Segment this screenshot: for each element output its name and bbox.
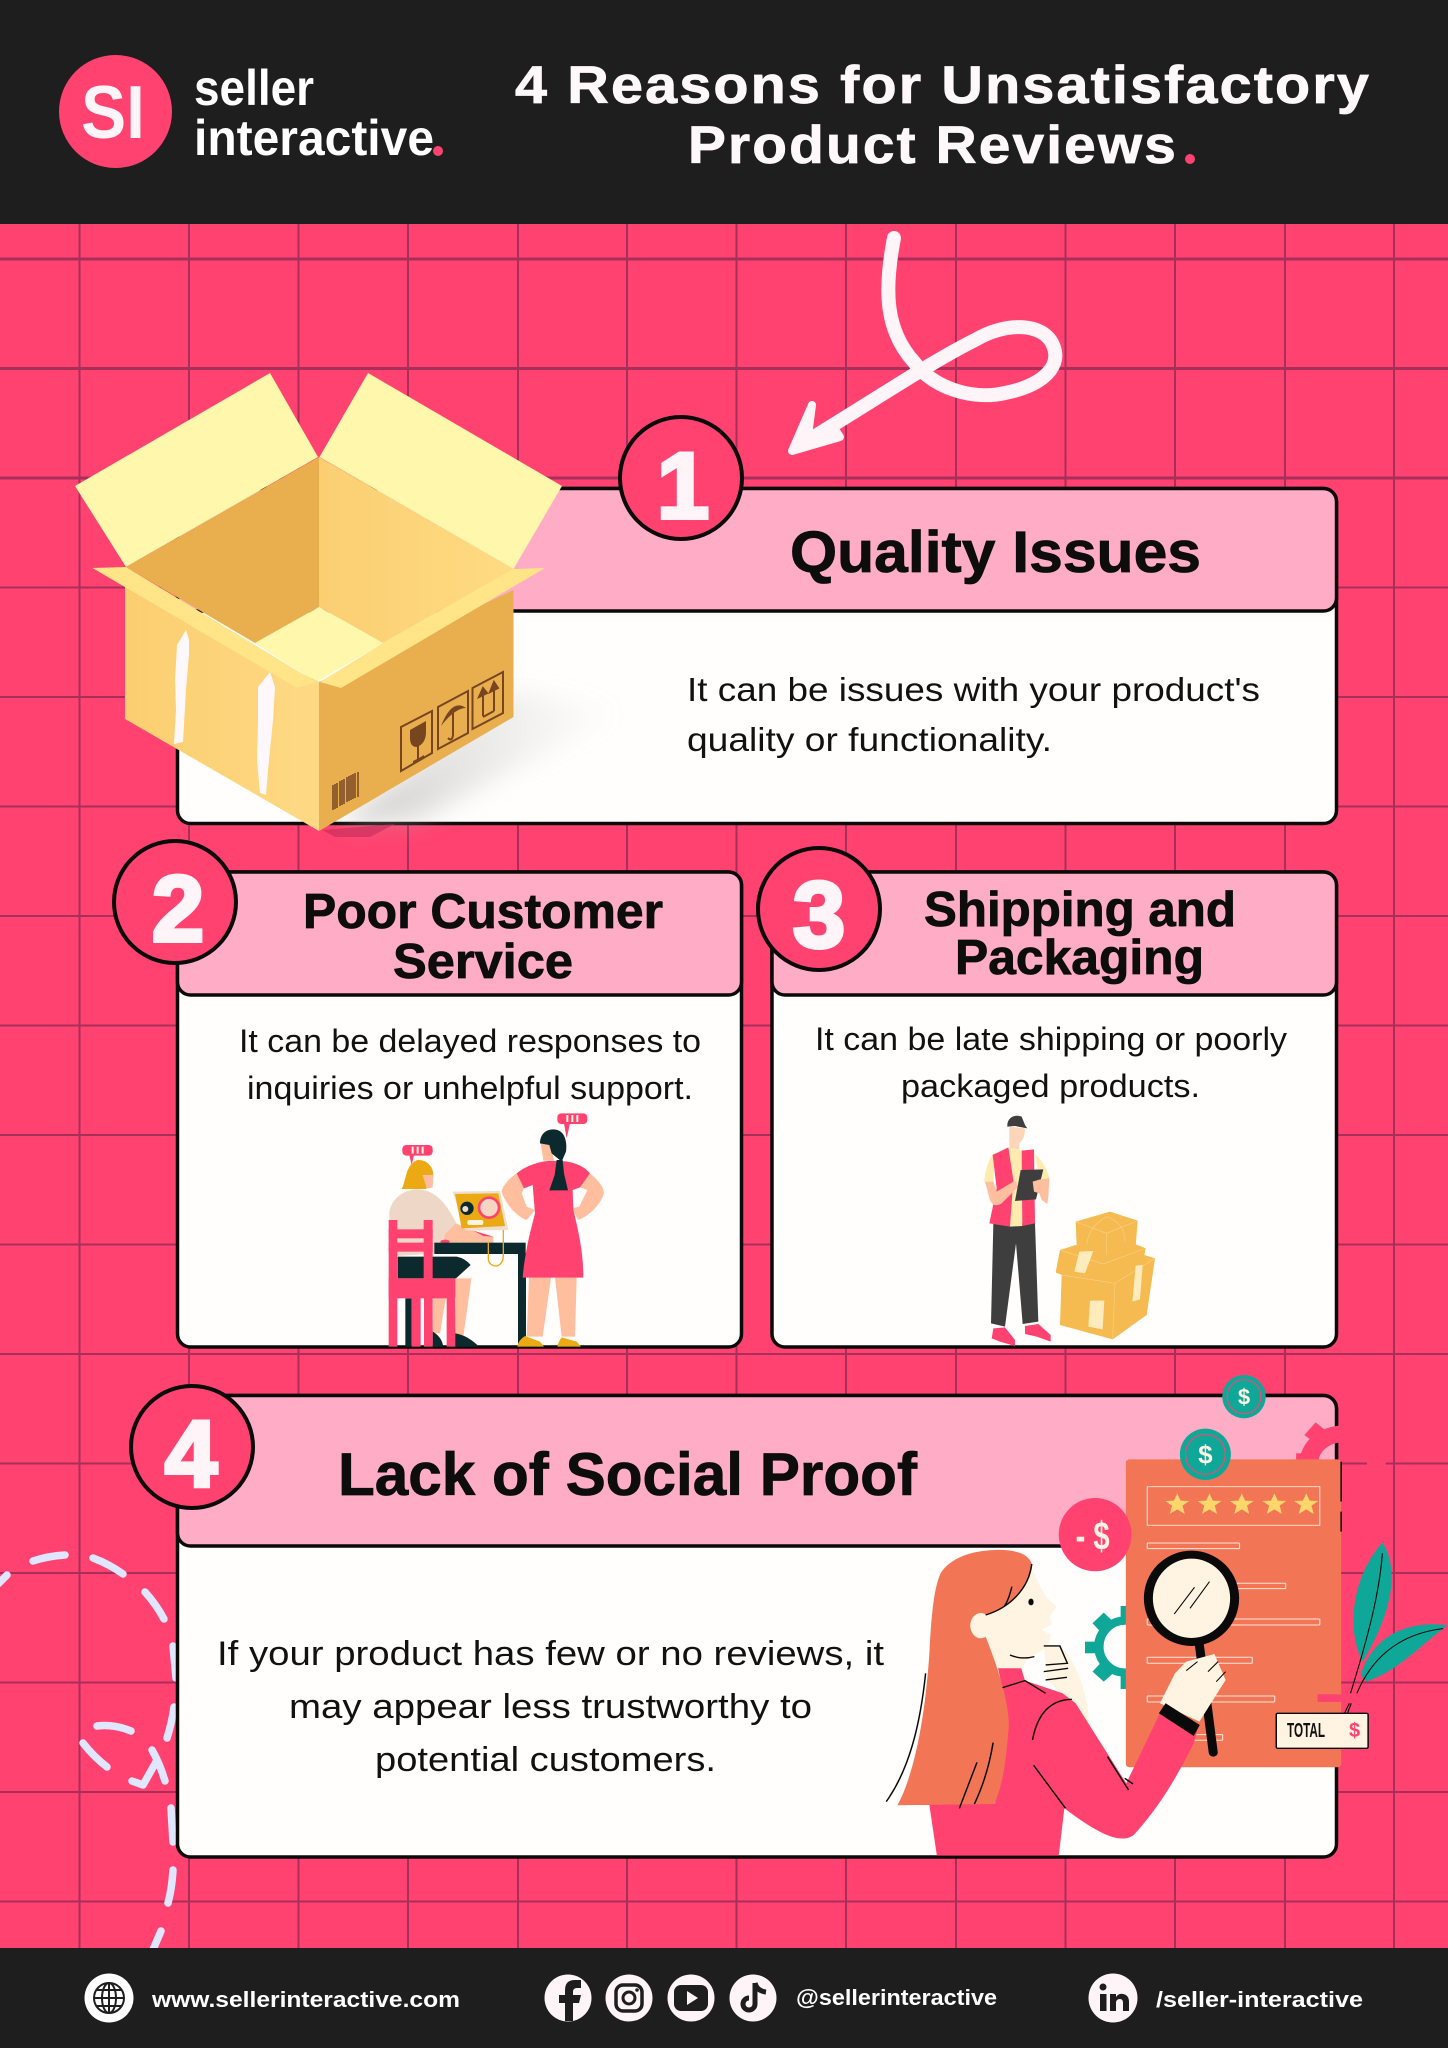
number badge 1 xyxy=(620,417,742,539)
logo: interactive xyxy=(194,110,434,166)
icon: instagram xyxy=(606,1974,652,2022)
speech bubble right xyxy=(557,1113,587,1138)
number badge 2: 2 xyxy=(152,856,204,961)
coin on panel: $ xyxy=(1198,1440,1213,1470)
speech bubble left xyxy=(402,1145,433,1165)
rating stars xyxy=(1165,1493,1318,1514)
woman xyxy=(886,1550,1198,1856)
body text: poor customer service: It can be delayed responses to xyxy=(239,1023,701,1059)
table xyxy=(434,1230,526,1347)
heading: lack of social proof: Lack of Social Proof xyxy=(338,1441,918,1508)
number badge 4 xyxy=(131,1386,253,1508)
icon: facebook xyxy=(544,1974,592,2022)
number badge 3 xyxy=(758,848,880,970)
total tag frame xyxy=(1276,1713,1368,1748)
illustration: woman inspecting reviews xyxy=(886,1375,1448,1856)
title xyxy=(515,56,1371,175)
heading: quality issues: Quality Issues xyxy=(790,520,1201,585)
footer bar xyxy=(0,1948,1448,2048)
total label: TOTAL xyxy=(1287,1720,1325,1742)
coin top: $ xyxy=(1238,1385,1250,1410)
heading: shipping and packaging: Shipping and xyxy=(924,883,1236,937)
pink gear xyxy=(1296,1422,1376,1493)
hand and cuff xyxy=(1159,1654,1226,1736)
body text: poor customer service xyxy=(239,1023,701,1106)
title: 4 Reasons for Unsatisfactory xyxy=(515,56,1371,115)
body text: lack of social proof: If your product has few or no reviews, it xyxy=(217,1635,885,1673)
panel: card 1 quality issues xyxy=(178,488,1336,824)
heading: poor customer service: Service xyxy=(393,935,573,989)
body text: quality issues: quality or functionality. xyxy=(687,721,1052,758)
illustration: open cardboard box xyxy=(75,373,620,837)
header bar xyxy=(0,0,1448,224)
number badge 4: 4 xyxy=(165,1401,217,1506)
coin top xyxy=(1222,1375,1266,1418)
panel: card 2 poor customer service xyxy=(178,872,742,1347)
heading: poor customer service xyxy=(303,885,663,989)
body text: quality issues xyxy=(687,671,1260,758)
boxes xyxy=(1056,1212,1155,1339)
body text: poor customer service: inquiries or unhelpful support. xyxy=(247,1070,693,1106)
minus dollar badge xyxy=(1059,1498,1132,1571)
number badge 2 xyxy=(114,841,236,963)
panel: card 3 shipping and packaging xyxy=(772,872,1336,1347)
social handle: @sellerinteractive xyxy=(796,1985,997,2010)
decorative dashed arrow xyxy=(0,1555,176,1952)
barcode xyxy=(333,772,358,810)
heading: shipping and packaging xyxy=(924,883,1236,985)
standing woman xyxy=(502,1129,604,1347)
icon: youtube xyxy=(668,1974,714,2022)
logo xyxy=(59,55,443,168)
body text: lack of social proof: potential customers. xyxy=(375,1741,716,1779)
logo: seller xyxy=(194,60,314,116)
body text: shipping and packaging xyxy=(815,1021,1287,1104)
total label: $ xyxy=(1349,1720,1360,1742)
minus dollar badge: - $ xyxy=(1076,1514,1110,1558)
teal gear xyxy=(1085,1606,1151,1689)
title: Product Reviews xyxy=(688,116,1178,175)
linkedin handle: /seller-interactive xyxy=(1156,1987,1363,2012)
heading: shipping and packaging: Packaging xyxy=(955,931,1204,985)
number badge 3: 3 xyxy=(793,862,845,967)
box handling icons xyxy=(401,672,503,771)
seated woman xyxy=(389,1160,493,1347)
plant xyxy=(1344,1543,1448,1713)
magnifying glass xyxy=(1148,1555,1235,1753)
laptop xyxy=(453,1191,508,1237)
coin on panel xyxy=(1180,1429,1231,1480)
body text: lack of social proof: may appear less trustworthy to xyxy=(289,1688,812,1726)
website address: www.sellerinteractive.com xyxy=(151,1987,460,2012)
illustration: delivery man with boxes xyxy=(984,1116,1155,1346)
body text: lack of social proof xyxy=(217,1635,885,1779)
icon: globe xyxy=(84,1974,134,2022)
arrow xyxy=(792,238,1055,451)
body text: quality issues: It can be issues with your product's xyxy=(687,671,1260,708)
body text: shipping and packaging: It can be late shipping or poorly xyxy=(815,1021,1287,1057)
chair xyxy=(389,1220,455,1347)
box tears xyxy=(174,630,275,795)
heading: poor customer service: Poor Customer xyxy=(303,885,663,939)
man xyxy=(984,1116,1051,1346)
icon: tiktok xyxy=(730,1974,776,2022)
panel: card 4 lack of social proof xyxy=(178,1396,1336,1857)
illustration: two women at a laptop xyxy=(389,1113,604,1347)
body text: shipping and packaging: packaged products. xyxy=(901,1068,1200,1104)
icon: linkedin xyxy=(1088,1974,1138,2022)
logo: SI xyxy=(81,70,145,154)
review lines xyxy=(1147,1543,1320,1740)
number badge 1: 1 xyxy=(657,433,709,538)
review panel xyxy=(1126,1459,1341,1767)
